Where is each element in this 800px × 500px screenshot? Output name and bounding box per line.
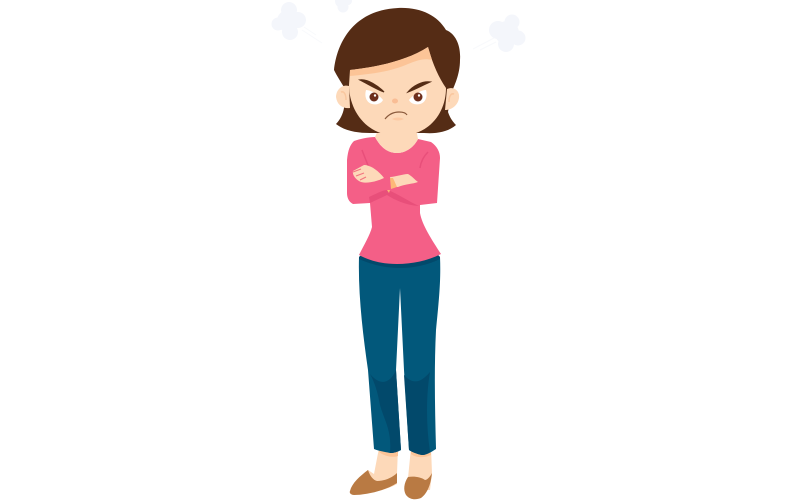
- nose: [392, 98, 398, 104]
- ear left: [336, 86, 350, 108]
- neck: [375, 128, 418, 153]
- ear right: [445, 88, 459, 110]
- crossed arms and hands: [353, 165, 418, 193]
- right eye: [408, 82, 430, 104]
- icon: steam puff top: [335, 0, 352, 12]
- face: [349, 47, 446, 136]
- right leg and foot: [404, 448, 432, 499]
- pink shirt: [347, 137, 441, 264]
- hair back: [334, 8, 460, 133]
- frowning mouth: [385, 112, 407, 120]
- icon: steam puff left: [272, 2, 322, 43]
- left leg and foot: [350, 448, 398, 495]
- left eye: [360, 80, 384, 104]
- forehead hair shadow: [350, 47, 432, 76]
- icon: steam puff right: [473, 14, 526, 52]
- jeans: [359, 252, 440, 455]
